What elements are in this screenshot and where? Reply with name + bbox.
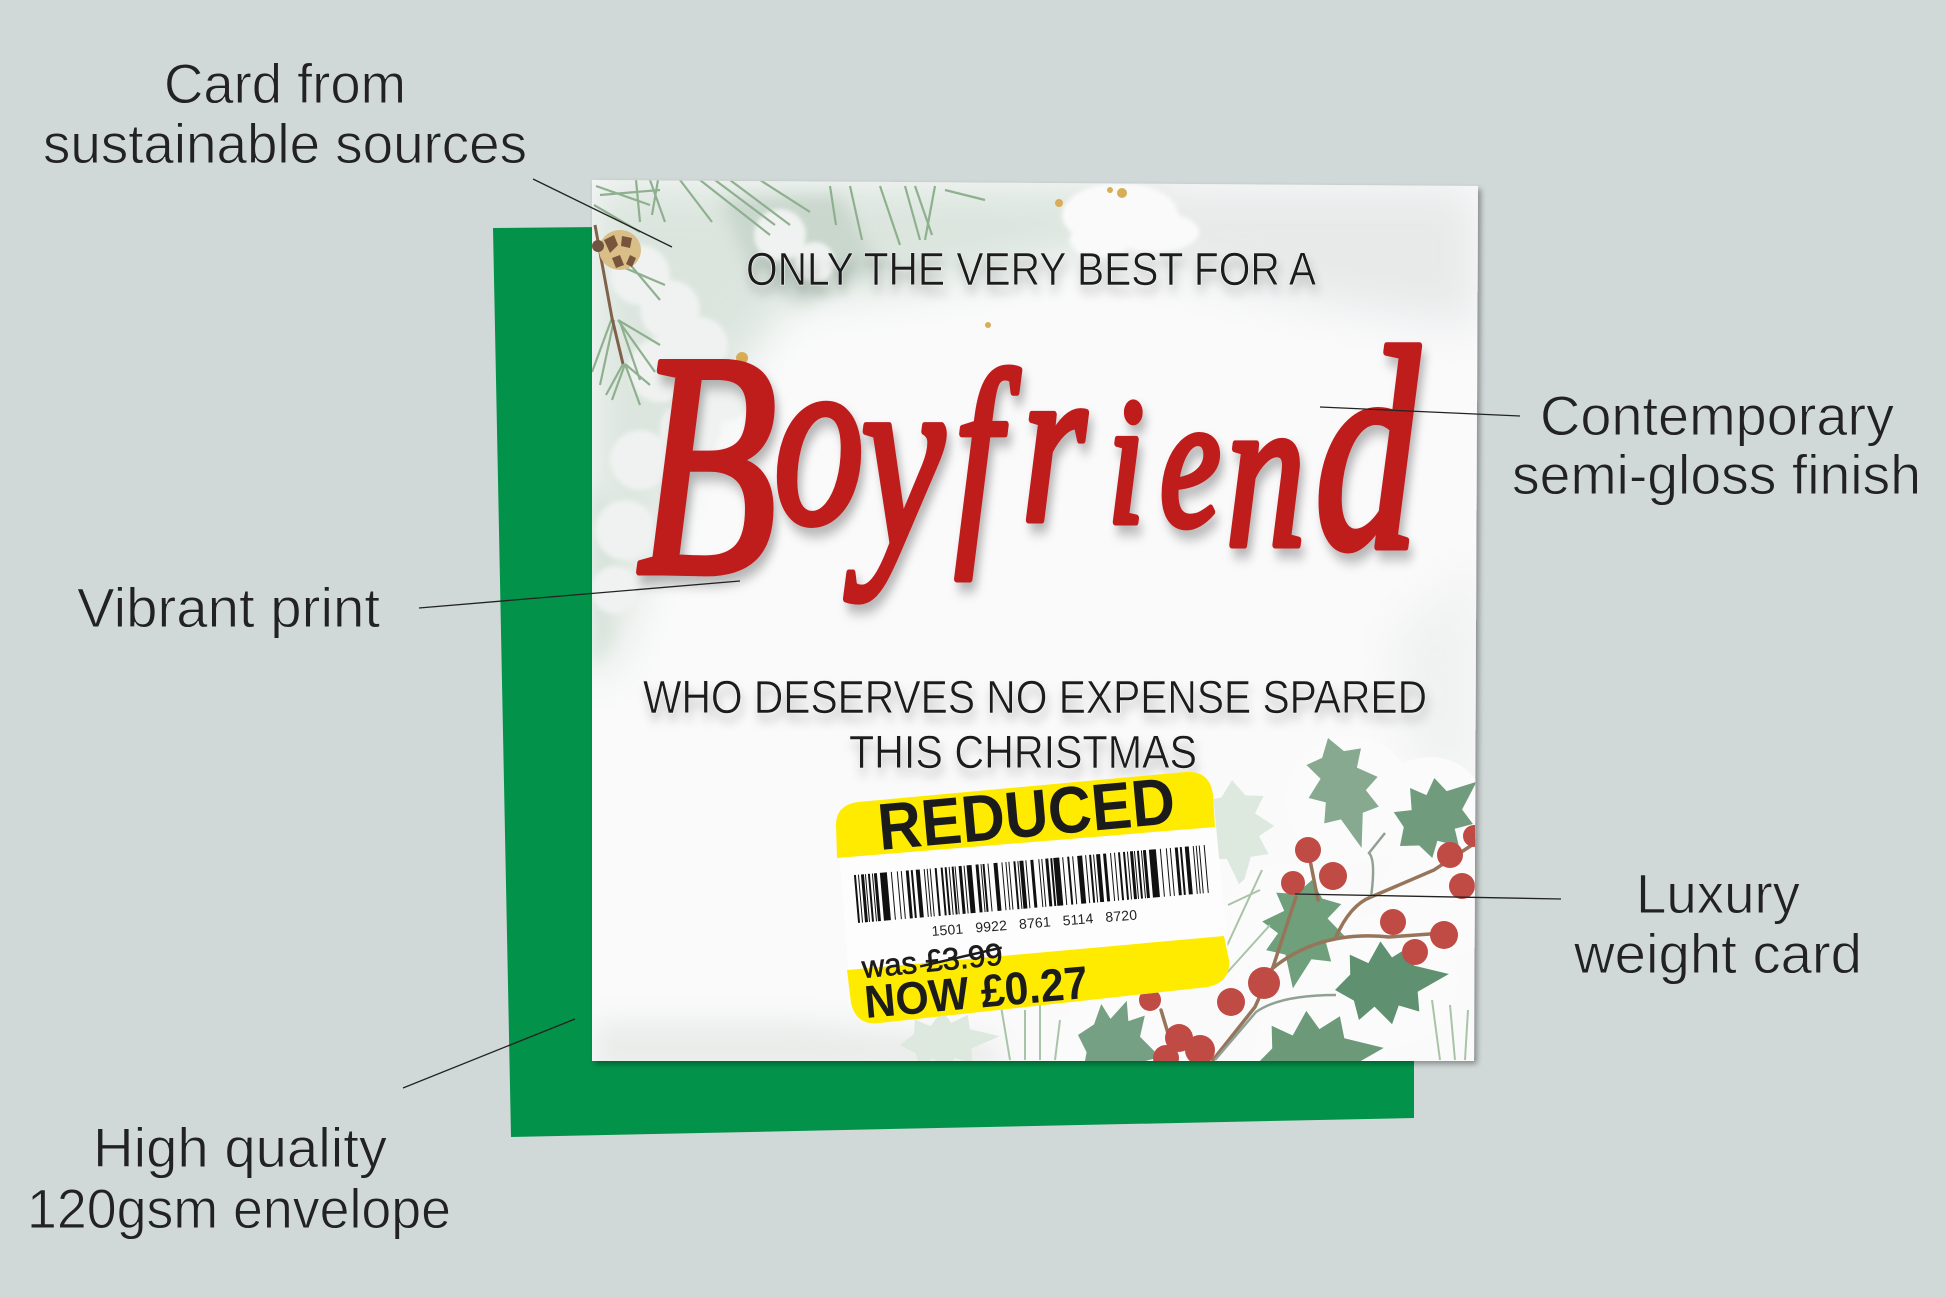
- barcode: [856, 869, 1207, 899]
- card subheading: WHO DESERVES NO EXPENSE SPARED: [643, 671, 1427, 723]
- sticker heading: REDUCED: [875, 763, 1178, 864]
- callout: high quality 120gsm envelope: 120gsm envelope: [27, 1177, 451, 1240]
- watercolour wash: [592, 180, 1478, 1075]
- greetings card: [591, 180, 1501, 1116]
- pale holly: [897, 777, 1279, 1075]
- script word: Boyfriend: o: [774, 300, 864, 577]
- reduced price sticker: [836, 763, 1229, 1028]
- gold flecks: [736, 187, 1127, 364]
- script word: Boyfriend: r: [1022, 316, 1087, 570]
- script word: Boyfriend: f: [955, 326, 1020, 580]
- barcode number: 1501 9922 8761 5114 8720: [931, 907, 1138, 939]
- callout: card from sustainable sources: Card from: [164, 52, 406, 115]
- script word: Boyfriend: i: [1108, 361, 1144, 561]
- callout: vibrant print: Vibrant print: [77, 576, 380, 639]
- card heading: only the very best: ONLY THE VERY BEST FOR A: [746, 243, 1316, 295]
- red berries: [1139, 825, 1485, 1071]
- callout: luxury weight card: weight card: [1573, 922, 1862, 985]
- script word: Boyfriend: d: [1315, 289, 1420, 610]
- callout: card from sustainable sources: sustainable sources: [43, 112, 527, 175]
- callout: luxury weight card: Luxury: [1636, 862, 1800, 925]
- pine sprigs near holly: [1000, 870, 1468, 1060]
- holly branches: [1161, 845, 1472, 1060]
- script word: Boyfriend: n: [1226, 350, 1305, 593]
- callout: luxury weight card: [1295, 862, 1862, 985]
- callout: contemporary semi-gloss finish: Contemporary: [1540, 384, 1894, 447]
- callout: high quality 120gsm envelope: [27, 1019, 575, 1240]
- pine cone: [592, 230, 641, 270]
- callout: contemporary semi-gloss finish: [1320, 384, 1921, 506]
- script word: Boyfriend: B: [636, 289, 777, 642]
- callout: card from sustainable sources: [43, 52, 672, 247]
- script word: Boyfriend: e: [1160, 355, 1221, 566]
- card subheading: [643, 671, 1427, 778]
- callout: contemporary semi-gloss finish: semi-gloss finish: [1512, 443, 1921, 506]
- pine branch and needles: [592, 180, 985, 405]
- script word: Boyfriend: y: [845, 314, 945, 602]
- white halo behind holly: [1239, 760, 1476, 934]
- holly leaves: [1066, 727, 1501, 1113]
- callout: vibrant print: [77, 576, 740, 639]
- green envelope: [493, 227, 1414, 1137]
- card subheading: THIS CHRISTMAS: [849, 726, 1197, 778]
- now price: NOW £0.27: [862, 956, 1090, 1028]
- white petals: [591, 183, 1199, 614]
- callout: high quality 120gsm envelope: High quality: [93, 1116, 387, 1179]
- was price: was £3.99: [859, 937, 1004, 985]
